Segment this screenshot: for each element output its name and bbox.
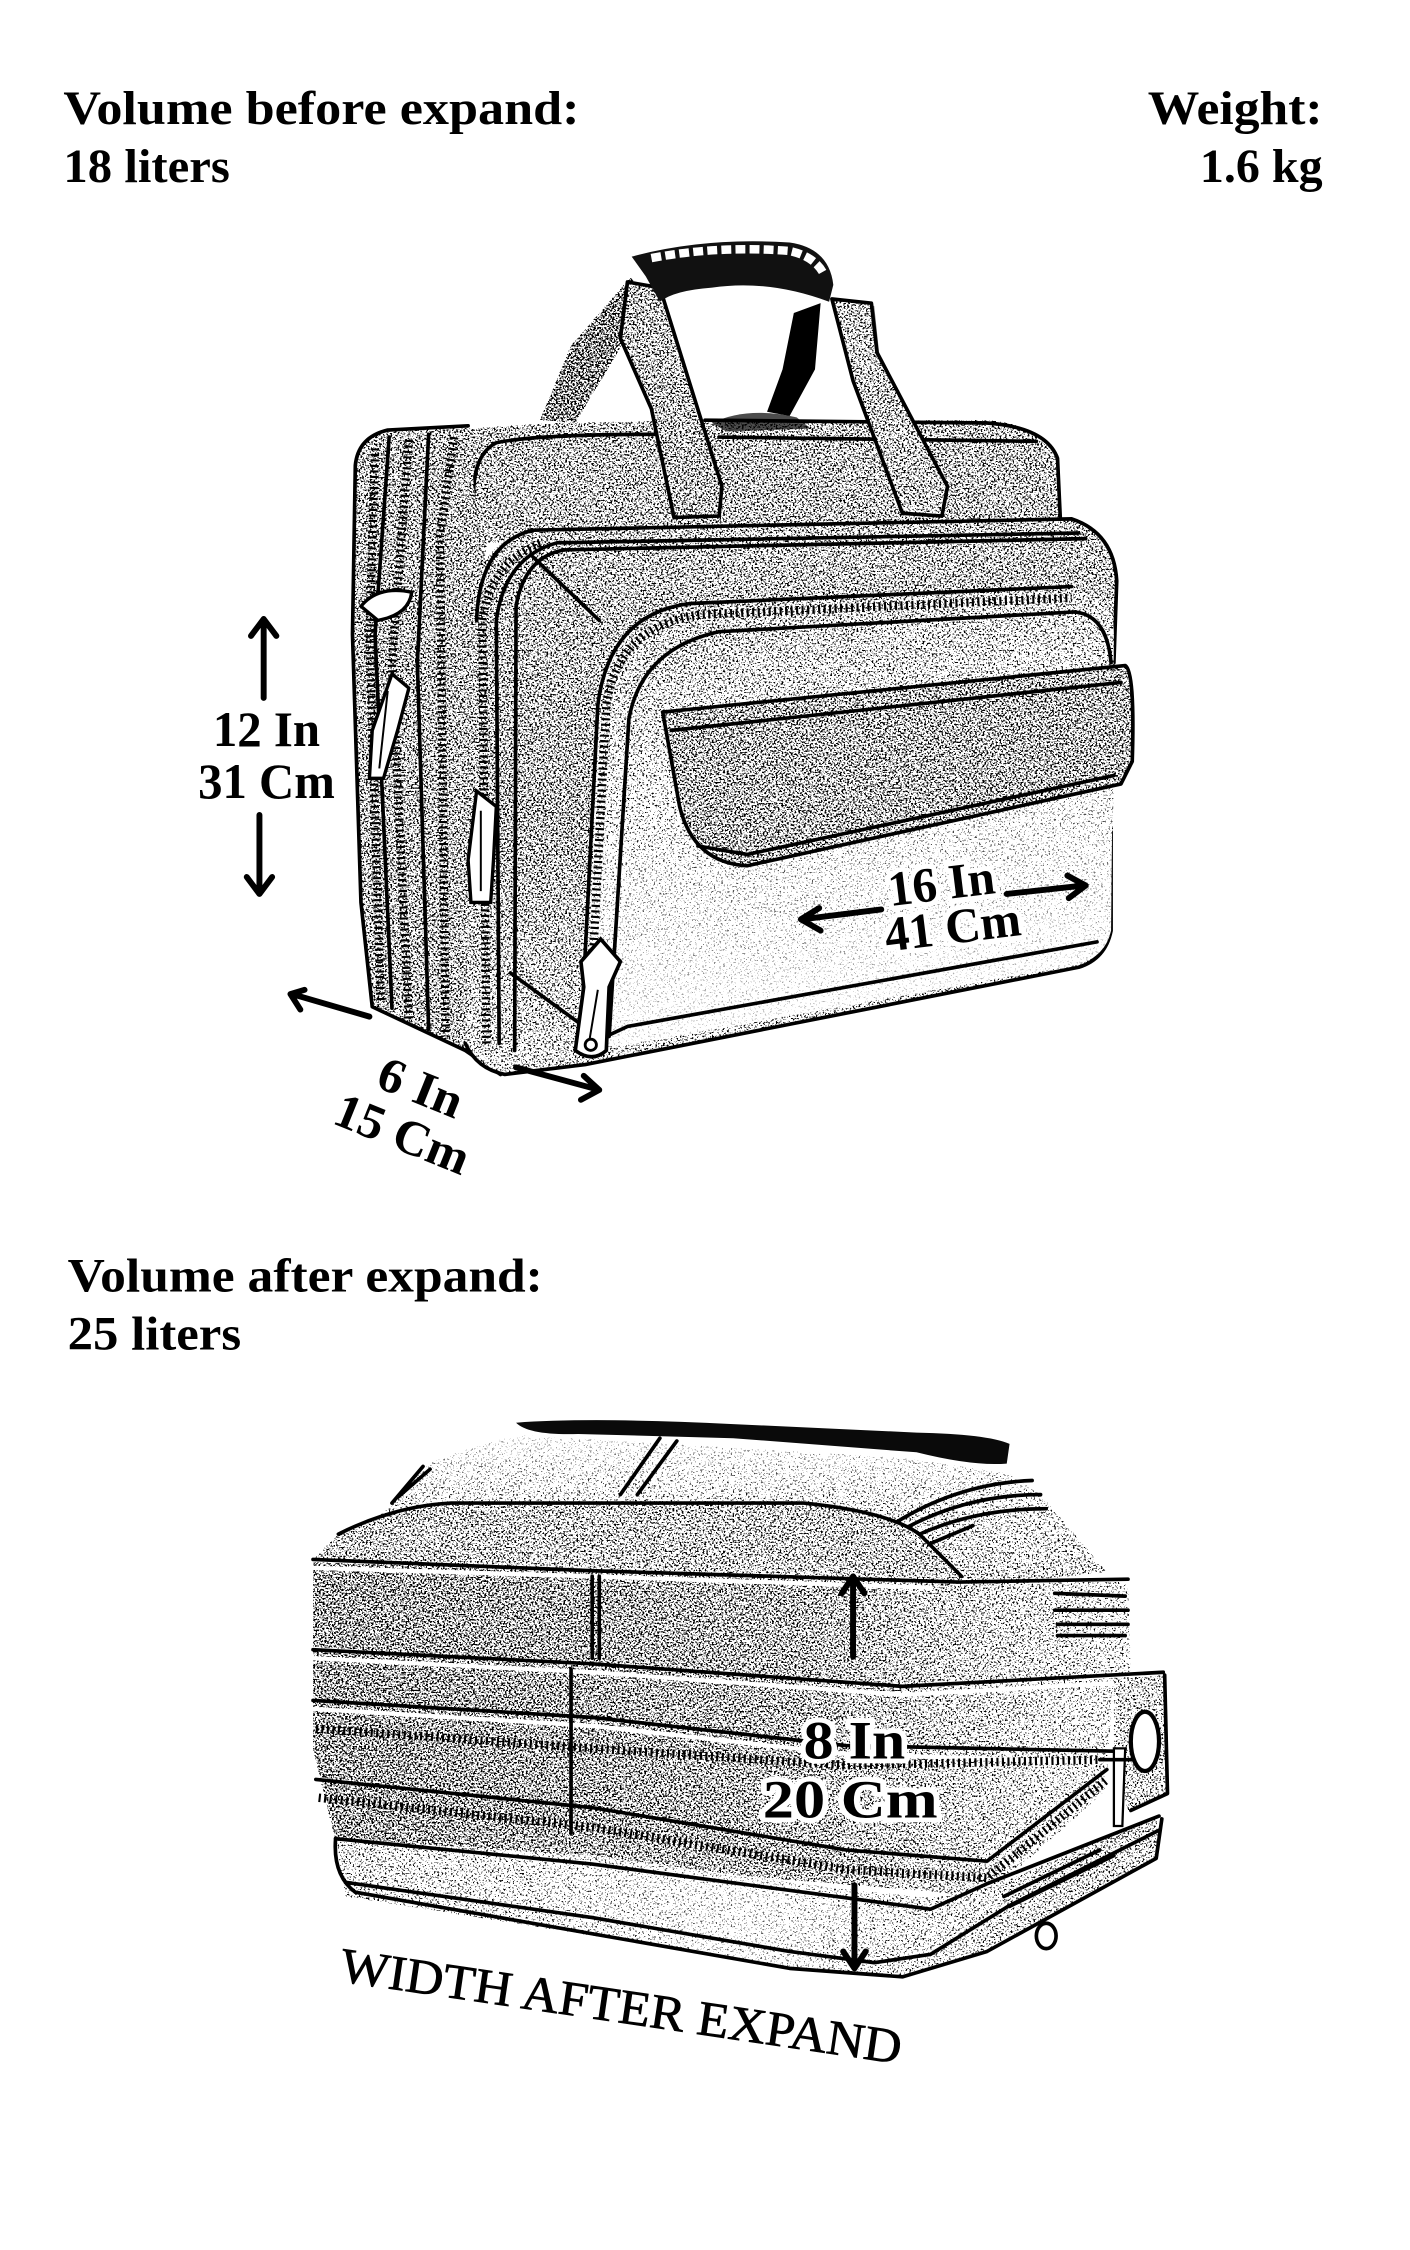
height arrow up: [251, 619, 276, 698]
length arrow left: [801, 908, 881, 931]
expanded height label: [763, 1710, 938, 1829]
illustration: closed bag: [352, 241, 1133, 1074]
expanded bag handle: [516, 1420, 1010, 1464]
depth label: 15 Cm: [327, 1082, 478, 1186]
length label: [881, 849, 1024, 963]
bag rear strap: [540, 278, 880, 423]
heading: volume after expand: 25 liters: [68, 1307, 241, 1360]
bag pocket flap: [663, 666, 1133, 866]
heading: volume after expand: Volume after expand:: [68, 1250, 543, 1303]
expanded height label: 8 In: [804, 1710, 905, 1770]
expanded bag upper bevel: [313, 1503, 962, 1576]
height arrow down: [247, 815, 272, 894]
expanded bag top lid: [324, 1435, 1107, 1586]
heading: volume before expand: 18 liters: [63, 140, 230, 193]
expanded height arrow down: [843, 1885, 866, 1968]
expanded bag upper band: [313, 1559, 1131, 1686]
heading: volume before expand: Volume before expand:: [63, 82, 580, 135]
heading: weight: 1.6 kg: [1200, 140, 1323, 193]
heading: weight: [1148, 82, 1323, 193]
bag handle and front straps: [620, 241, 948, 517]
expanded height label: 20 Cm: [763, 1769, 938, 1829]
depth label: 6 In: [370, 1045, 472, 1129]
length label: 16 In: [885, 849, 998, 917]
heading: weight: Weight:: [1148, 82, 1323, 135]
illustration: expanded bag: [313, 1420, 1167, 1977]
height label: 31 Cm: [198, 754, 335, 809]
depth arrow right: [516, 1067, 599, 1100]
height label: [198, 702, 335, 809]
bag front main panel: [465, 519, 1117, 1074]
depth arrow left: [290, 990, 369, 1017]
length arrow right: [1007, 876, 1086, 898]
expanded bag middle bands: [313, 1650, 1167, 1896]
bag front pocket with zipper: [575, 587, 1114, 1057]
caption: width after expand: WIDTH AFTER EXPAND: [337, 1938, 906, 2075]
bag rear compartment: [468, 413, 1060, 543]
expanded bag lower band: [335, 1816, 1162, 1977]
expanded height arrow up: [842, 1576, 864, 1657]
length label: 41 Cm: [881, 891, 1024, 963]
height label: 12 In: [213, 702, 320, 757]
heading: volume before expand: [63, 82, 580, 193]
bag side gusset with zippers: [352, 426, 501, 1074]
heading: volume after expand: [68, 1250, 543, 1360]
expanded bag right side fittings: [1100, 1675, 1167, 1826]
